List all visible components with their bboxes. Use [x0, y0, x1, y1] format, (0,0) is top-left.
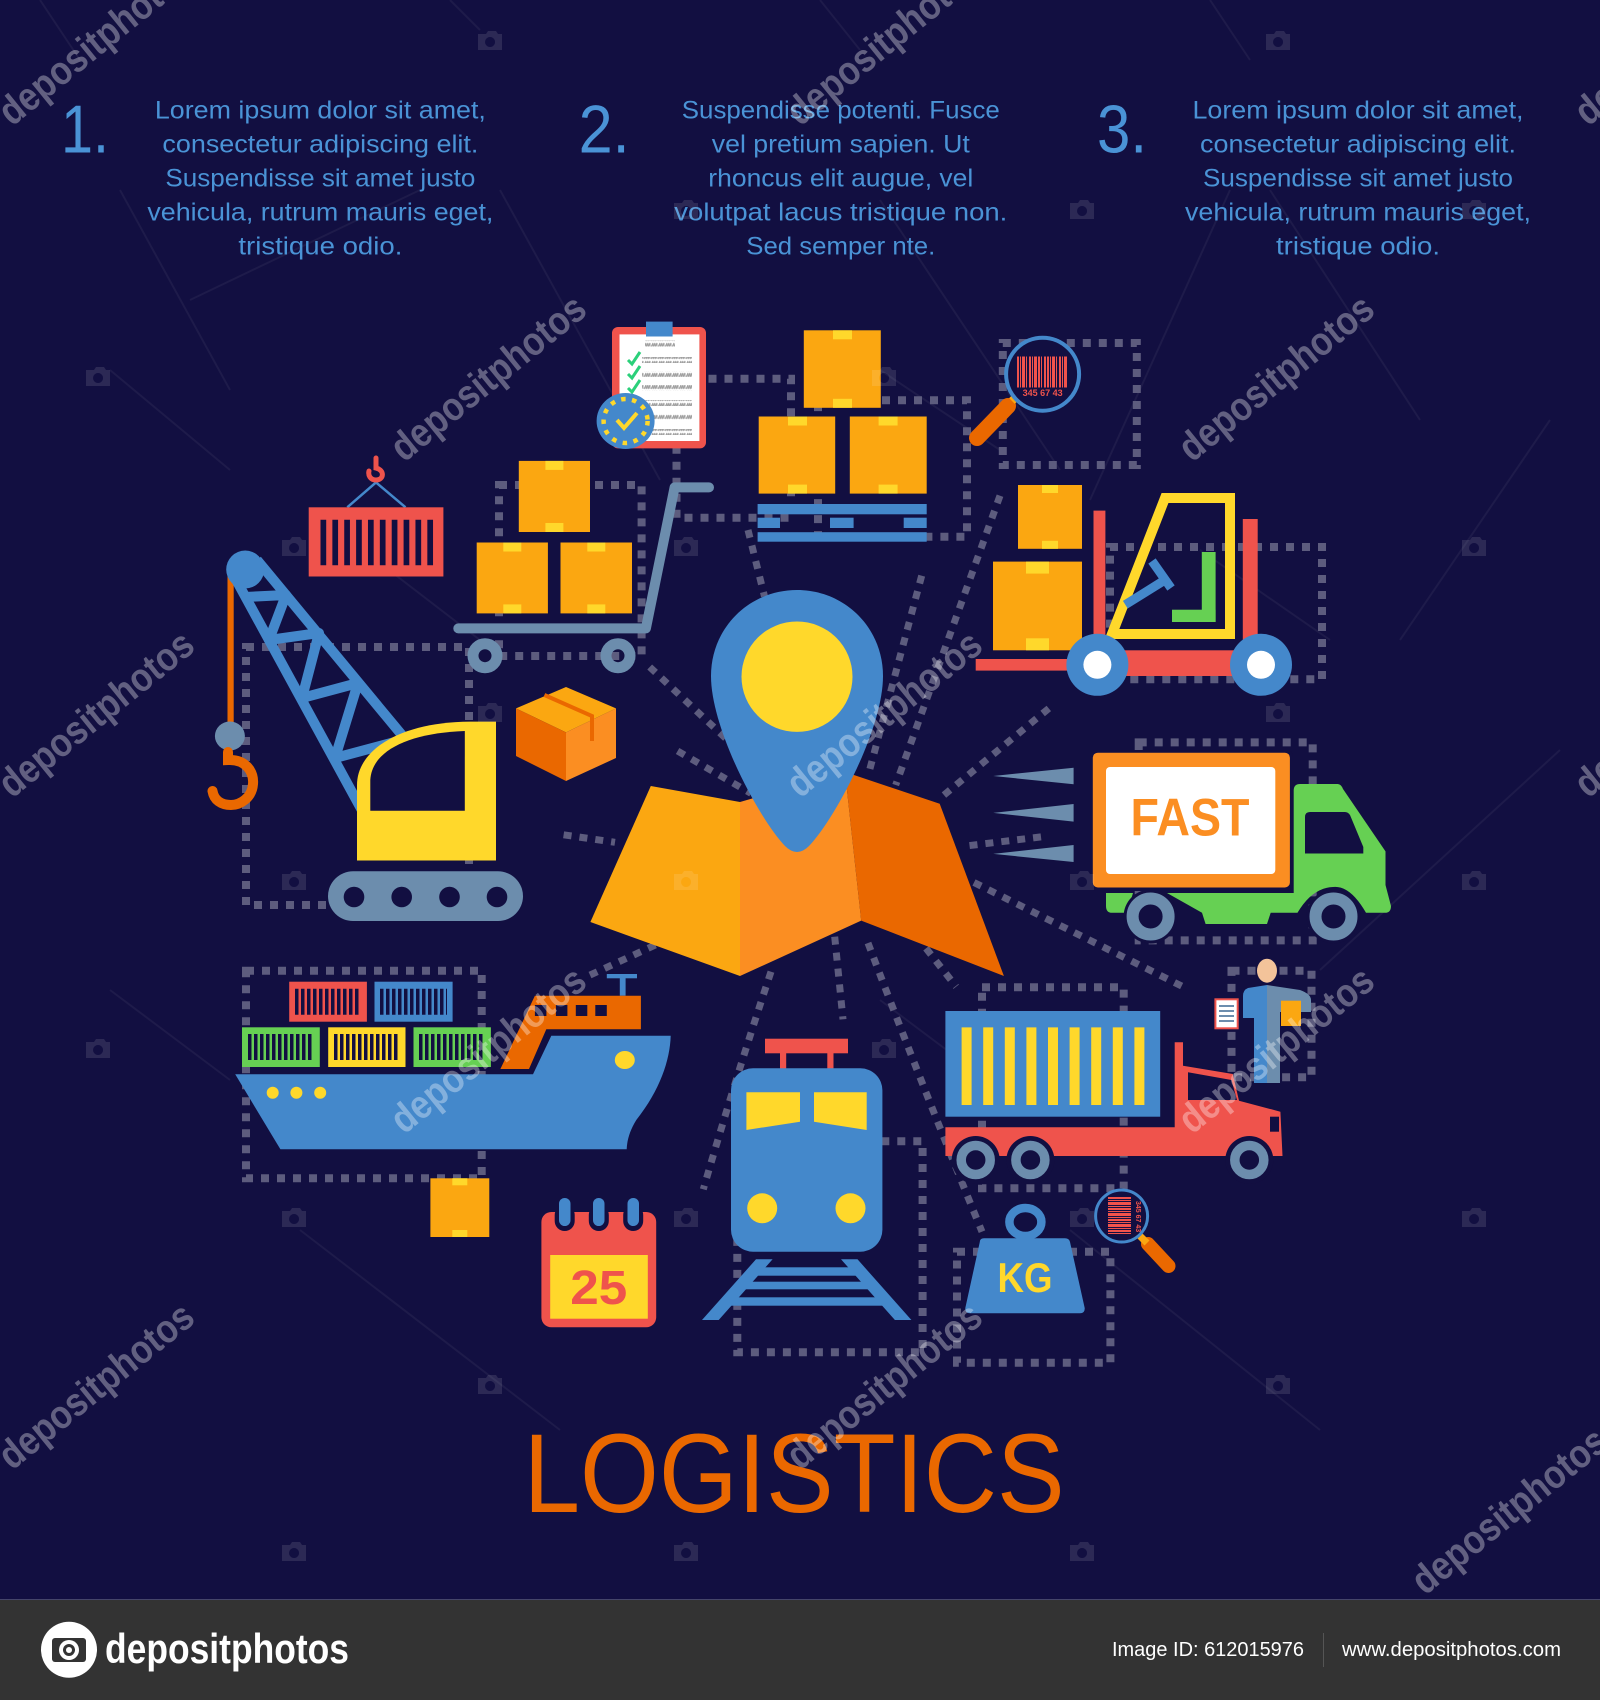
text block 2	[579, 92, 1007, 260]
text block 3: Suspendisse sit amet justo	[1203, 164, 1513, 192]
footer logo: depositphotos	[105, 1625, 349, 1672]
icon: calendar	[541, 1198, 656, 1327]
text block 1: 1.	[61, 92, 109, 168]
icon: cart with boxes	[458, 461, 709, 668]
icon: train	[702, 1039, 911, 1320]
text block 3: Lorem ipsum dolor sit amet,	[1192, 96, 1524, 124]
text block 2: 2.	[579, 92, 630, 168]
icon: crane	[212, 550, 523, 921]
watermark text: depositphotos	[778, 622, 991, 806]
text block 1: vehicula, rutrum mauris eget,	[147, 198, 493, 226]
icon: calendar: 25	[570, 1262, 627, 1315]
icon: pallet with boxes	[758, 330, 927, 542]
text block 1	[61, 92, 493, 260]
icon: fast delivery truck: FAST	[1130, 789, 1250, 848]
text block 2: rhoncus elit augue, vel	[708, 164, 973, 192]
icon: cardboard box	[516, 687, 616, 781]
icon: small box	[430, 1178, 489, 1237]
watermark text: depositphotos	[382, 286, 595, 470]
footer url: www.depositphotos.com	[1341, 1639, 1561, 1661]
icon: forklift	[976, 485, 1292, 696]
icon: magnifier barcode small: 345 67 43	[1134, 1201, 1141, 1232]
icon: cargo ship	[235, 974, 671, 1149]
text block 1: Lorem ipsum dolor sit amet,	[155, 96, 486, 124]
icon: hanging red container	[309, 458, 443, 576]
icon: fast delivery truck	[993, 750, 1391, 944]
icon: magnifier barcode	[977, 338, 1079, 438]
icon: worker with clipboard and parcel	[1215, 959, 1311, 1083]
icon: weight KG: KG	[998, 1254, 1052, 1301]
icon: magnifier barcode: 345 67 43	[1023, 388, 1063, 398]
text block 3: consectetur adipiscing elit.	[1200, 130, 1516, 158]
text block 2: vel pretium sapien. Ut	[712, 130, 970, 158]
watermark text: depositphotos	[1170, 286, 1383, 470]
footer bar	[0, 1599, 1600, 1700]
text block 2: volutpat lacus tristique non.	[674, 198, 1007, 226]
icon: container truck	[945, 1011, 1282, 1184]
watermark text: depositphotos	[382, 958, 595, 1142]
watermark camera marks	[86, 31, 1486, 1561]
text block 2: Sed semper nte.	[746, 232, 935, 260]
footer image id: Image ID: 612015976	[1112, 1639, 1304, 1661]
footer logo	[41, 1622, 349, 1678]
text block 3: vehicula, rutrum mauris eget,	[1185, 198, 1531, 226]
text block 1: consectetur adipiscing elit.	[162, 130, 478, 158]
dashed connector frames	[246, 343, 1322, 1363]
watermark text: depositphotos	[778, 1294, 991, 1478]
text block 3	[1097, 92, 1531, 260]
text block 2: Suspendisse potenti. Fusce	[682, 96, 1000, 124]
map with location pin	[590, 590, 1004, 976]
text block 1: tristique odio.	[238, 232, 402, 260]
text block 3: tristique odio.	[1276, 232, 1440, 260]
watermark text: depositphotos	[1170, 958, 1383, 1142]
icon: magnifier barcode small	[1096, 1190, 1168, 1266]
icon: clipboard checklist with clock	[597, 322, 706, 449]
text block 1: Suspendisse sit amet justo	[165, 164, 475, 192]
radial dotted lines	[564, 496, 1183, 1232]
title: LOGISTICS	[524, 1411, 1065, 1536]
icon: weight KG	[965, 1208, 1085, 1313]
text block 3: 3.	[1097, 92, 1147, 168]
